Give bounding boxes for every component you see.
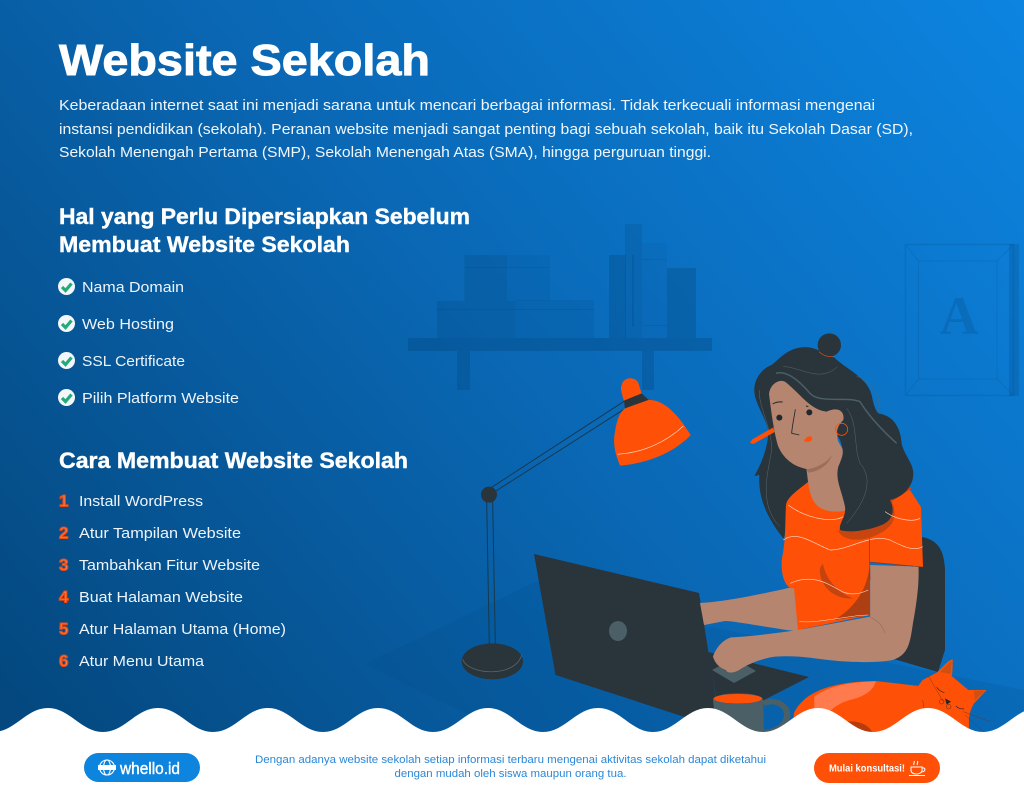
footer message: dengan mudah oleh siswa maupun orang tua.	[394, 768, 626, 780]
back arm	[700, 586, 802, 632]
icon: globe www	[98, 760, 116, 775]
step 4: 4	[59, 588, 69, 606]
orange shirt	[782, 482, 923, 630]
woman working at laptop	[700, 333, 923, 673]
step 6: 6	[59, 652, 68, 670]
framed letter A picture	[906, 244, 1019, 396]
step 1: 1	[59, 492, 68, 510]
step 2: 2	[59, 524, 68, 542]
intro paragraph	[59, 97, 913, 161]
framed letter A picture: A	[940, 286, 978, 346]
title: Website Sekolah	[59, 36, 430, 85]
front arm and hand	[713, 565, 919, 673]
footer with wavy edge	[0, 708, 1024, 799]
shirt folds	[790, 562, 870, 622]
whello.id logo pill	[84, 753, 200, 782]
consult button: Mulai konsultasi!	[829, 764, 905, 774]
intro paragraph: instansi pendidikan (sekolah). Peranan website menjadi sangat penting bagi sebuah sekolah, baik itu Sekolah Dasar (SD),	[59, 121, 913, 138]
desk lamp	[462, 378, 691, 679]
back hair	[750, 348, 813, 538]
pencil	[750, 427, 775, 444]
footer message	[255, 754, 766, 780]
footer message: Dengan adanya website sekolah setiap informasi terbaru mengenai aktivitas sekolah dapat diketahui	[255, 754, 766, 766]
check item: Web Hosting	[58, 315, 174, 333]
step 5: 5	[59, 620, 68, 638]
consult button	[814, 753, 940, 783]
heading: preparation: Hal yang Perlu Dipersiapkan Sebelum	[59, 204, 470, 229]
icon: coffee cup	[909, 761, 925, 776]
check item: SSL Certificate: SSL Certificate	[82, 353, 185, 370]
step 5: Atur Halaman Utama (Home)	[79, 621, 286, 638]
check item: Pilih Platform Website: Pilih Platform Website	[82, 390, 239, 407]
numbered steps	[59, 492, 286, 670]
check item: Web Hosting: Web Hosting	[82, 316, 174, 333]
check item: Nama Domain: Nama Domain	[82, 279, 184, 296]
shelf with boxes and books	[408, 224, 712, 390]
whello.id logo pill: whello.id	[119, 759, 180, 778]
step 3: 3	[59, 556, 68, 574]
step 1: Install WordPress	[79, 493, 203, 510]
head, neck, hair and shirt details	[763, 333, 923, 580]
step 4: Buat Halaman Website	[79, 589, 243, 606]
heading: preparation	[59, 204, 470, 257]
intro paragraph: Keberadaan internet saat ini menjadi sarana untuk mencari berbagai informasi. Tidak terkecuali informasi mengenai	[59, 97, 875, 114]
step 3: Tambahkan Fitur Website	[79, 557, 260, 574]
chair	[880, 537, 945, 672]
step 6: Atur Menu Utama	[79, 653, 205, 670]
coffee mug	[713, 693, 787, 737]
checklist	[58, 278, 239, 407]
intro paragraph: Sekolah Menengah Pertama (SMP), Sekolah Menengah Atas (SMA), hingga perguruan tinggi.	[59, 144, 711, 161]
heading: steps: Cara Membuat Website Sekolah	[59, 448, 408, 473]
heading: preparation: Membuat Website Sekolah	[59, 232, 350, 257]
desk surface	[365, 581, 1024, 745]
step 2: Atur Tampilan Website	[79, 525, 241, 542]
sleeping orange cat	[794, 659, 990, 740]
laptop	[534, 554, 809, 722]
